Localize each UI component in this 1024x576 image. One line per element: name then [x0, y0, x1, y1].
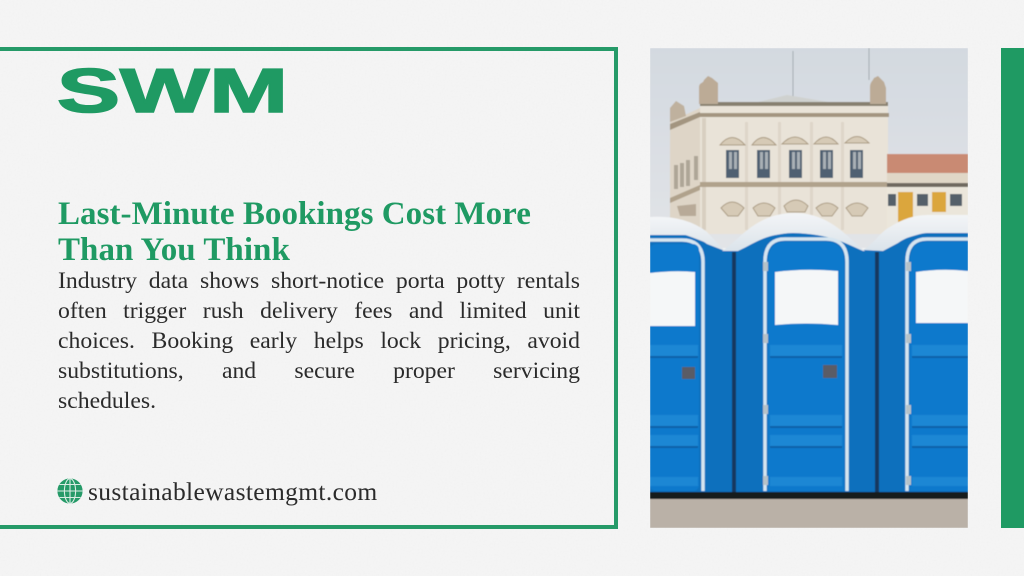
- building: main palace: [670, 48, 889, 234]
- heading: [58, 196, 531, 268]
- text block: body copy: substitutions, and secure proper servicing: [58, 358, 580, 384]
- text block: body copy: often trigger rush delivery fees and limited unit: [58, 298, 580, 324]
- text block: body copy: schedules.: [58, 388, 156, 414]
- dark unit separators: [732, 252, 736, 492]
- handle: [823, 365, 837, 378]
- accent bar: right edge: [1001, 48, 1024, 528]
- windows, side: [674, 156, 698, 189]
- icon: globe: [57, 478, 83, 504]
- heading: Than You Think: [58, 232, 290, 268]
- photo: porta potties in front of a historic building: [650, 48, 968, 528]
- right unit door: [906, 239, 968, 491]
- panel: text frame: [0, 47, 618, 529]
- left unit door: [650, 240, 703, 491]
- heading: Last-Minute Bookings Cost More: [58, 196, 531, 232]
- porta potty roofs: [650, 213, 968, 251]
- windows, front: [726, 150, 863, 178]
- base shadow: [650, 491, 968, 499]
- text block: body copy: Industry data shows short-notice porta potty rentals: [58, 268, 580, 294]
- porta potty bodies: [650, 232, 968, 492]
- text block: body copy: [58, 268, 580, 414]
- handle: [682, 367, 695, 379]
- website url: sustainablewastemgmt.com: [88, 477, 378, 506]
- building: red-roofed yellow house: [887, 154, 968, 232]
- text block: body copy: choices. Booking early helps lock pricing, avoid: [58, 328, 580, 354]
- sky: [650, 48, 968, 248]
- middle unit door: [763, 239, 847, 491]
- ground: [650, 498, 968, 528]
- window pediments: [720, 136, 869, 216]
